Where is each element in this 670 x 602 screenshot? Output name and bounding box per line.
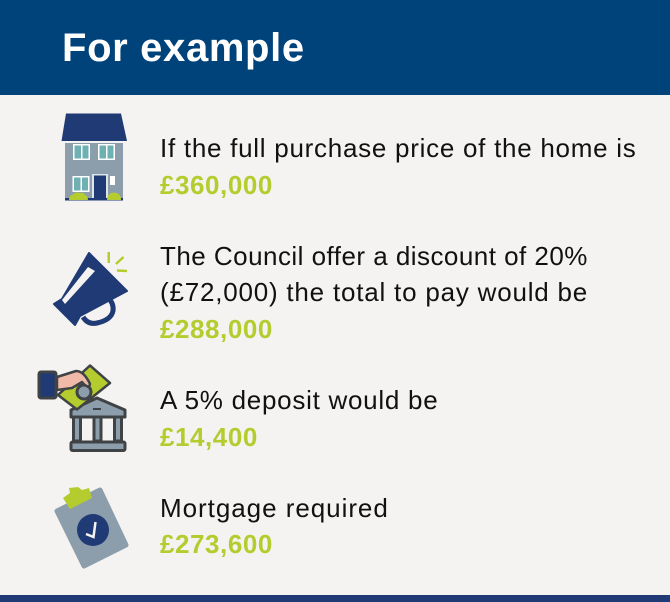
header band: [0, 0, 670, 95]
text block: council discount: (£72,000) the total to pay would be: [160, 277, 588, 307]
text block: purchase price: If the full purchase price of the home is: [160, 133, 637, 163]
icon: hand, money and bank: [39, 366, 125, 450]
text block: mortgage: Mortgage required: [160, 493, 389, 523]
text block: purchase price: £360,000: [160, 170, 273, 200]
icon: clipboard with clock: [57, 487, 126, 566]
text block: mortgage: [160, 493, 389, 559]
text block: purchase price: [160, 133, 637, 200]
title: For example: [62, 26, 305, 70]
text block: mortgage: £273,600: [160, 529, 273, 559]
text block: deposit: [160, 385, 438, 452]
text block: council discount: The Council offer a discount of 20%: [160, 241, 588, 271]
text block: council discount: £288,000: [160, 314, 273, 344]
icon: megaphone: [54, 252, 127, 325]
text block: council discount: [160, 241, 588, 344]
text block: deposit: A 5% deposit would be: [160, 385, 438, 415]
footer band: [0, 595, 670, 602]
text block: deposit: £14,400: [160, 422, 258, 452]
icon: house: [62, 114, 127, 200]
